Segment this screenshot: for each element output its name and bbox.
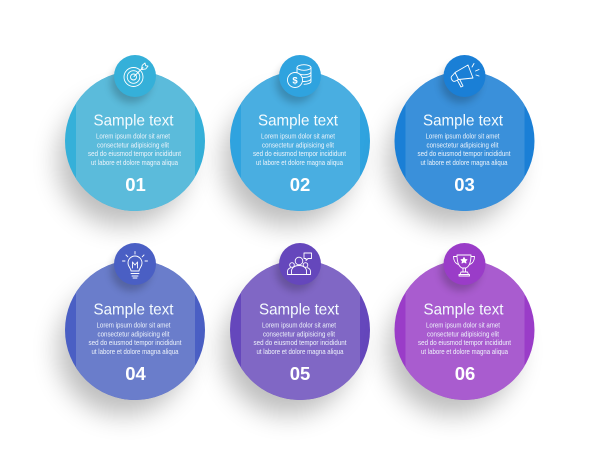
text block xyxy=(418,320,512,356)
text block: Lorem ipsum dolor sit amet xyxy=(261,132,336,140)
number: 01 xyxy=(125,174,146,195)
heading: Sample text xyxy=(94,302,174,318)
text block xyxy=(88,320,182,356)
text block: consectetur adipisicing elit xyxy=(98,329,170,338)
text block: Lorem ipsum dolor sit amet xyxy=(262,320,337,330)
text block: consectetur adipisicing elit xyxy=(262,140,335,149)
text block: sed do eiusmod tempor incididunt xyxy=(254,338,347,347)
text block xyxy=(88,132,182,167)
text block: ut labore et dolore magna aliqua xyxy=(420,158,508,167)
text block xyxy=(254,320,347,356)
panel: card 05 xyxy=(223,243,370,415)
text block: Lorem ipsum dolor sit amet xyxy=(96,132,171,140)
text block: Lorem ipsum dolor sit amet xyxy=(426,132,500,140)
heading: Sample text xyxy=(424,302,504,318)
text block: sed do eiusmod tempor incididunt xyxy=(88,149,182,158)
heading: Sample text xyxy=(423,112,504,130)
number: 04 xyxy=(125,363,146,384)
text block: ut labore et dolore magna aliqua xyxy=(91,158,179,167)
text block: ut labore et dolore magna aliqua xyxy=(256,347,344,356)
text block: consectetur adipisicing elit xyxy=(426,140,499,149)
number: 03 xyxy=(454,174,475,195)
icon: trophy xyxy=(444,243,486,285)
text block xyxy=(253,132,347,167)
number: 02 xyxy=(290,174,310,195)
heading: Sample text xyxy=(259,302,340,318)
heading: Sample text xyxy=(94,112,174,130)
icon: light bulb xyxy=(114,243,156,285)
text block: sed do eiusmod tempor incididunt xyxy=(88,338,182,347)
text block: consectetur adipisicing elit xyxy=(97,140,170,149)
icon: target xyxy=(114,55,156,97)
number: 05 xyxy=(290,363,310,384)
text block: sed do eiusmod tempor incididunt xyxy=(418,338,512,347)
heading: Sample text xyxy=(258,112,339,130)
panel: card 04 xyxy=(58,243,205,415)
text block: sed do eiusmod tempor incididunt xyxy=(253,149,347,158)
text block: consectetur adipisicing elit xyxy=(263,329,336,338)
icon: dollar sign: $ xyxy=(292,76,298,86)
text block xyxy=(418,132,511,167)
text block: consectetur adipisicing elit xyxy=(427,329,500,338)
text block: ut labore et dolore magna aliqua xyxy=(421,347,509,356)
panel: card 06 xyxy=(388,243,534,415)
text block: ut labore et dolore magna aliqua xyxy=(256,158,344,167)
icon: coins xyxy=(279,55,321,97)
icon: people with speech bubble xyxy=(279,243,321,285)
panel: card 02 xyxy=(223,55,370,226)
number: 06 xyxy=(455,363,475,384)
panel: card 01 xyxy=(58,55,205,226)
text block: sed do eiusmod tempor incididunt xyxy=(418,149,511,158)
text block: Lorem ipsum dolor sit amet xyxy=(426,320,501,330)
text block: Lorem ipsum dolor sit amet xyxy=(96,320,171,330)
icon: megaphone xyxy=(444,55,486,97)
text block: ut labore et dolore magna aliqua xyxy=(92,347,179,356)
panel: card 03 xyxy=(388,55,534,226)
